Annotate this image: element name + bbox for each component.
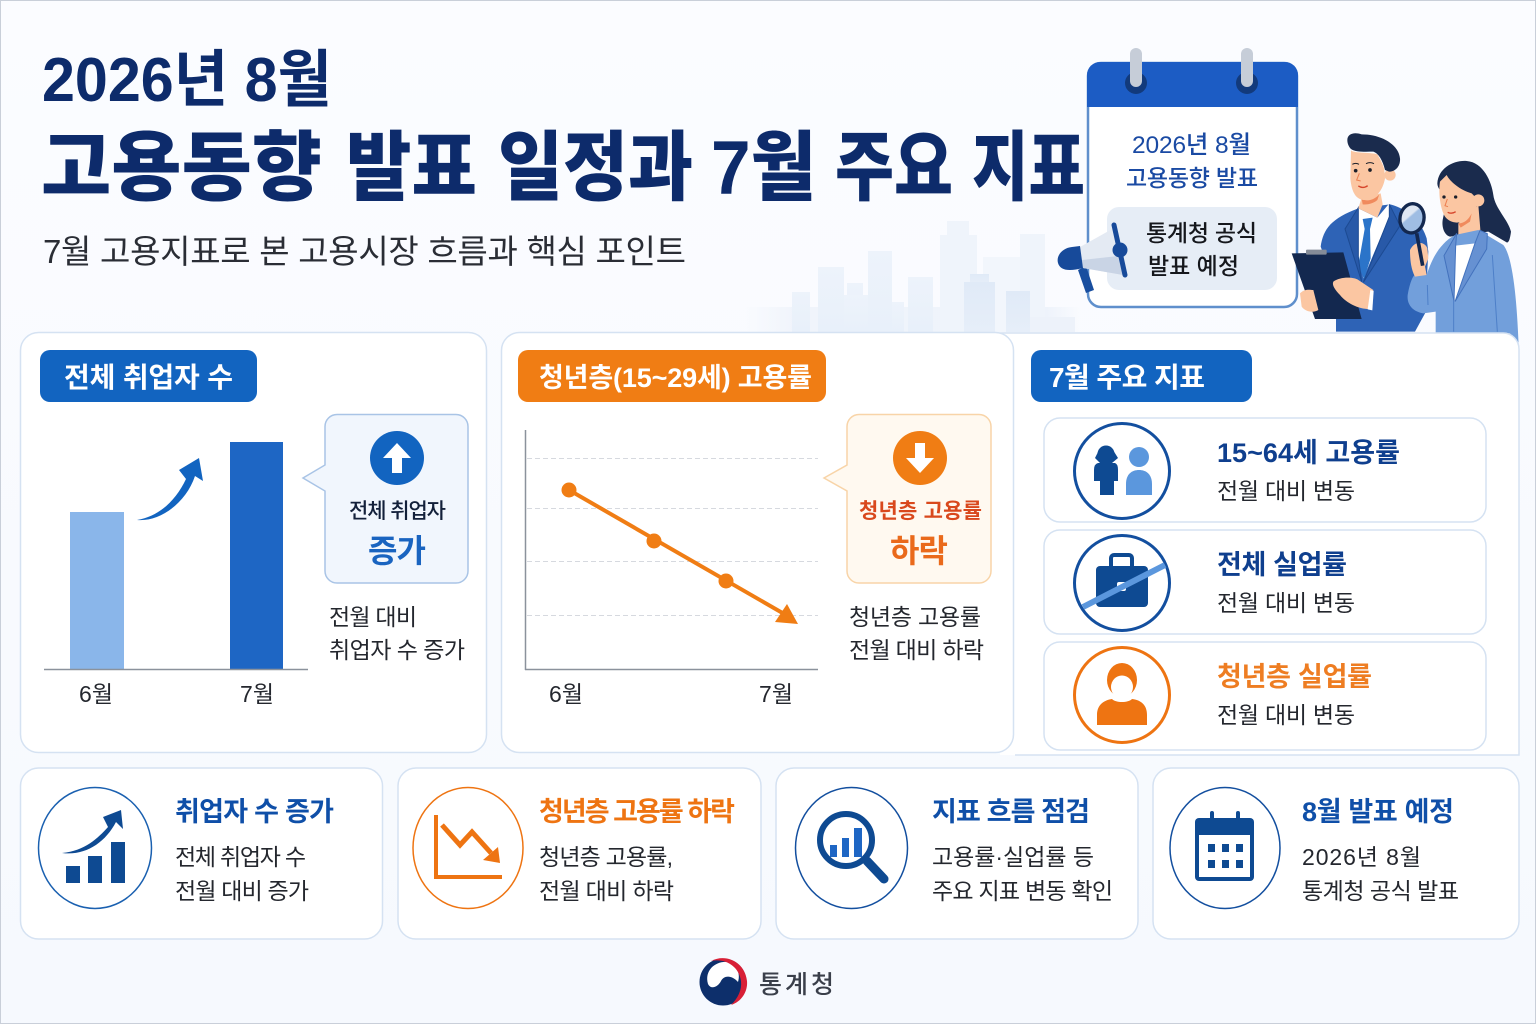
row: ages 15-64 employment rate bbox=[1044, 418, 1486, 522]
indicators heading bbox=[1031, 350, 1252, 402]
card: youth rate decline: 청년층 고용률 하락 bbox=[539, 797, 735, 827]
footer logo bbox=[700, 958, 834, 1006]
background skyline bbox=[745, 221, 1080, 332]
panel: total employed bbox=[20, 332, 486, 752]
callout: increase bbox=[303, 414, 468, 583]
indicators heading: 7월 주요 지표 bbox=[1049, 362, 1205, 393]
card: indicator flow check: 고용률·실업률 등 bbox=[932, 844, 1094, 870]
title: main heading: 발표 bbox=[346, 126, 477, 211]
note text: 전월 대비 bbox=[329, 604, 417, 630]
card: indicator flow check bbox=[776, 768, 1138, 939]
panel: major indicators bbox=[1000, 333, 1519, 755]
icon: falling chart bbox=[436, 815, 502, 877]
row: youth unemployment rate: 전월 대비 변동 bbox=[1217, 702, 1355, 728]
icon: government emblem bbox=[700, 958, 747, 1006]
title: main heading: 7월 bbox=[711, 126, 816, 211]
card: August release: 통계청 공식 발표 bbox=[1302, 878, 1459, 904]
bar chart: 7월 bbox=[240, 681, 274, 707]
callout: decline: 청년층 고용률 bbox=[859, 500, 982, 523]
card: employed increase bbox=[20, 768, 382, 939]
row: total unemployment rate bbox=[1044, 530, 1486, 634]
card: youth rate decline: 전월 대비 하락 bbox=[539, 878, 674, 904]
title: main heading: 주요 bbox=[835, 126, 953, 211]
bar chart bbox=[44, 442, 308, 707]
card: August release: 8월 발표 예정 bbox=[1302, 797, 1454, 827]
note text: 청년층 고용률 bbox=[849, 604, 981, 630]
row: ages 15-64 employment rate: 전월 대비 변동 bbox=[1217, 478, 1355, 504]
icon: magnifier with bars bbox=[820, 814, 884, 879]
icon: two people bbox=[1094, 446, 1152, 495]
panel heading bbox=[518, 350, 826, 402]
calendar note line 1: 통계청 공식 bbox=[1146, 220, 1257, 246]
title: year and month: 2026년 8월 bbox=[42, 46, 332, 115]
title: main heading bbox=[41, 126, 1085, 211]
card: youth rate decline bbox=[398, 768, 761, 939]
icon: megaphone bbox=[1058, 225, 1128, 293]
title: main heading: 일정과 bbox=[498, 126, 693, 211]
row: youth unemployment rate bbox=[1044, 642, 1486, 750]
arrow: rising bbox=[137, 458, 203, 520]
calendar illustration bbox=[1087, 48, 1298, 307]
row: total unemployment rate: 전체 실업률 bbox=[1217, 550, 1347, 580]
subtitle: 7월 고용지표로 본 고용시장 흐름과 핵심 포인트 bbox=[43, 233, 686, 270]
calendar date text: 2026년 8월 bbox=[1132, 131, 1251, 159]
panel: youth employment rate bbox=[502, 332, 1014, 752]
line chart bbox=[525, 430, 818, 707]
card: August release: 2026년 8월 bbox=[1302, 844, 1421, 870]
card: employed increase: 전월 대비 증가 bbox=[175, 878, 309, 904]
line chart: 6월 bbox=[549, 681, 583, 707]
card: indicator flow check: 지표 흐름 점검 bbox=[932, 797, 1090, 827]
row: ages 15-64 employment rate: 15~64세 고용률 bbox=[1217, 438, 1400, 468]
card: youth rate decline: 청년층 고용률, bbox=[539, 844, 673, 870]
illustration: woman with magnifier bbox=[1398, 161, 1519, 346]
icon: person bbox=[1097, 663, 1147, 725]
card: employed increase: 취업자 수 증가 bbox=[175, 797, 334, 827]
panel heading: 전체 취업자 수 bbox=[64, 362, 233, 393]
title: main heading: 고용동향 bbox=[41, 126, 322, 211]
icon: rising bars bbox=[62, 810, 125, 883]
note text bbox=[849, 604, 984, 663]
card: August release bbox=[1153, 768, 1519, 939]
calendar note line 2: 발표 예정 bbox=[1148, 253, 1239, 279]
icon: calendar bbox=[1195, 811, 1254, 881]
bar chart: 6월 bbox=[79, 681, 113, 707]
title: main heading: 지표 bbox=[972, 126, 1085, 211]
card: employed increase: 전체 취업자 수 bbox=[175, 844, 306, 870]
calendar heading text: 고용동향 발표 bbox=[1126, 165, 1258, 191]
note text: 취업자 수 증가 bbox=[329, 637, 465, 663]
callout: increase: 전체 취업자 bbox=[349, 500, 446, 523]
row: total unemployment rate: 전월 대비 변동 bbox=[1217, 590, 1355, 616]
line chart: 7월 bbox=[759, 681, 793, 707]
footer logo: 통계청 bbox=[759, 971, 834, 999]
illustration: man with clipboard bbox=[1292, 133, 1428, 332]
row: youth unemployment rate: 청년층 실업률 bbox=[1217, 662, 1372, 692]
panel heading bbox=[40, 350, 257, 402]
icon: briefcase crossed out bbox=[1083, 555, 1165, 607]
panel heading: 청년층(15~29세) 고용률 bbox=[539, 363, 812, 393]
note text: 전월 대비 하락 bbox=[849, 637, 984, 663]
note text bbox=[329, 604, 465, 663]
callout: decline bbox=[824, 414, 991, 583]
callout: decline: 하락 bbox=[890, 533, 948, 569]
card: indicator flow check: 주요 지표 변동 확인 bbox=[932, 878, 1113, 904]
callout: increase: 증가 bbox=[368, 533, 426, 569]
